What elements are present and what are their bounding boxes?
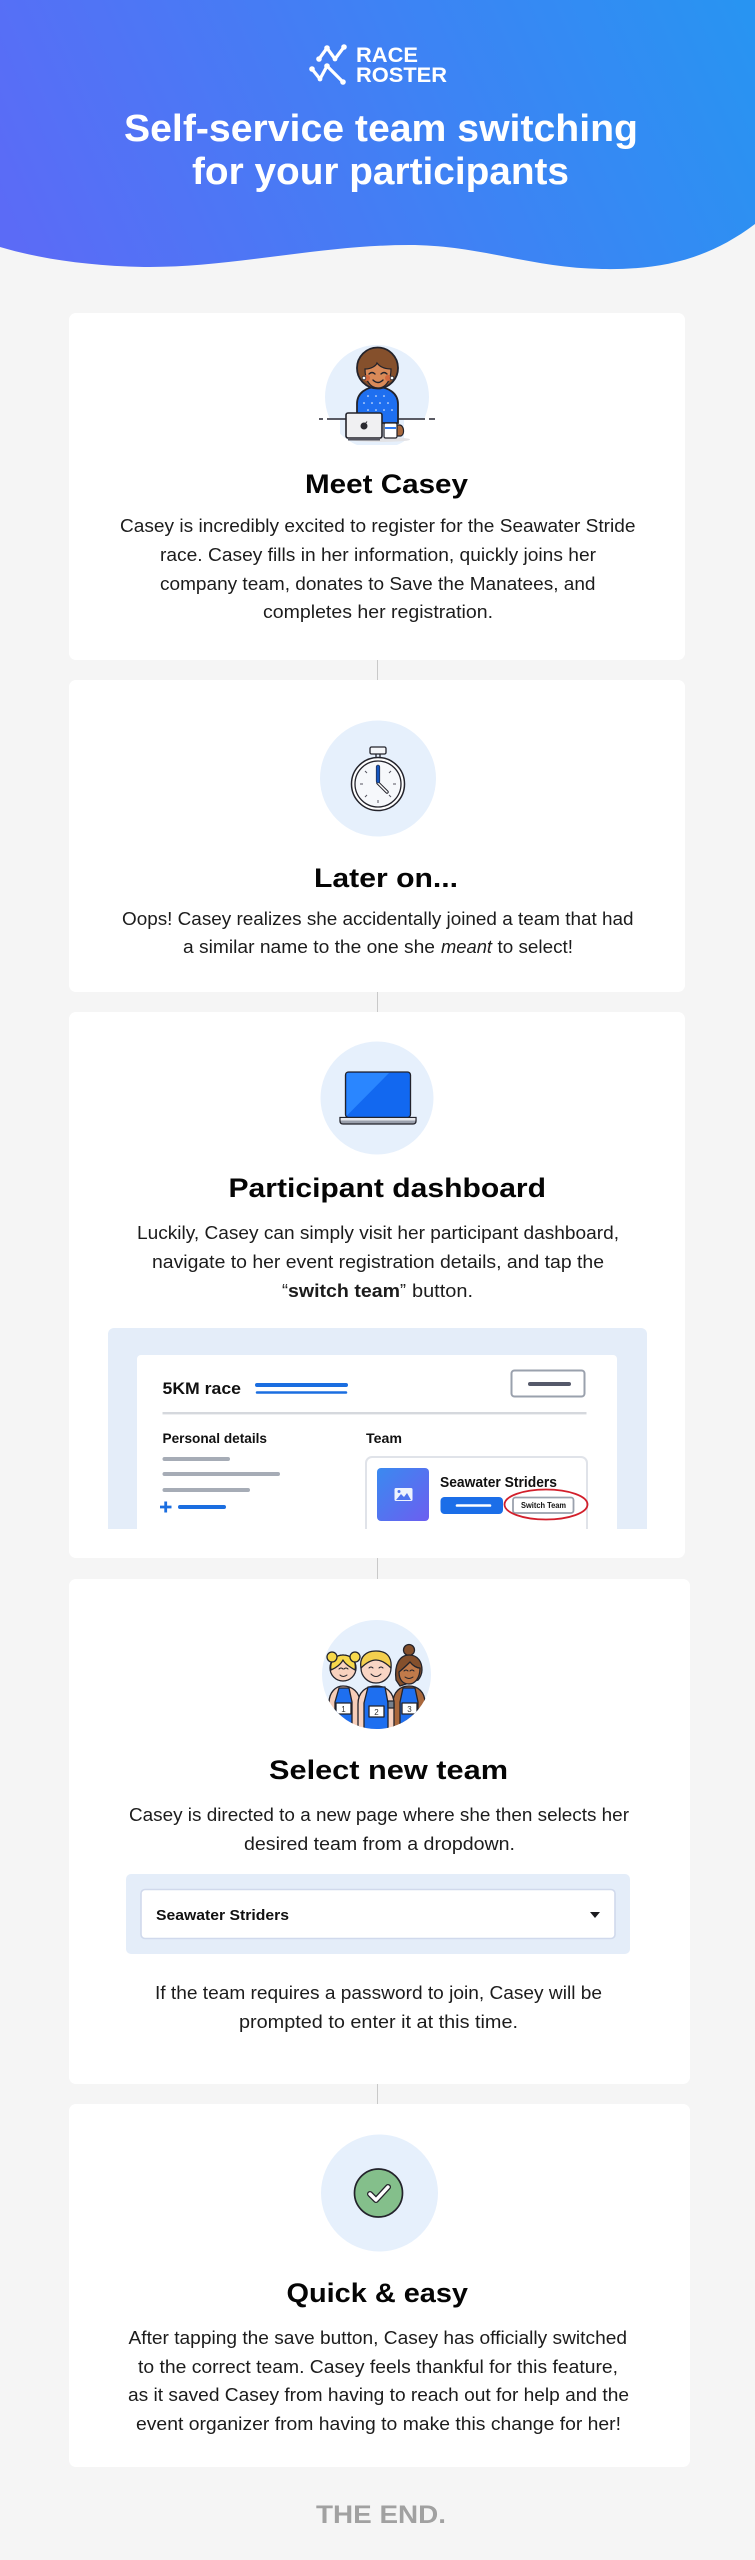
body text: After tapping the save button, Casey has officially switched [128,2328,627,2348]
body text [129,1805,629,1854]
body text [122,909,634,957]
body text: to the correct team. Casey feels thankful for this feature, [138,2357,618,2377]
runner 3: 3 [407,1705,412,1714]
placeholder button [512,1370,584,1396]
panel: Participant dashboard [69,1012,685,1558]
body text: race. Casey fills in her information, quickly joins her [160,545,596,565]
icon: Casey at laptop [319,345,435,449]
body text: desired team from a dropdown. [244,1834,515,1854]
body text: to select! [498,937,573,957]
panel: Select new team [69,1579,690,2084]
heading: Later on... [314,863,458,893]
personal details [160,1430,278,1512]
heading: Participant dashboard [228,1173,546,1203]
connector lines between cards [376,660,378,2104]
body text: meant [441,937,493,957]
body text: password note: prompted to enter it at this time. [239,2012,518,2032]
runner 2: 2 [374,1708,379,1717]
team section [365,1434,588,1529]
panel: Later on [69,680,685,992]
body text [128,2328,629,2434]
dashboard mockup [108,1328,647,1529]
team section: Seawater Striders [440,1475,557,1491]
title: for your participants [192,151,569,193]
dropdown mockup: Seawater Striders [156,1908,289,1924]
body text: a similar name to the one she [183,937,435,957]
runner 1: 1 [341,1705,346,1714]
team section: Team [366,1430,402,1446]
heading: Select new team [269,1755,508,1785]
body text [137,1223,619,1301]
heading: Meet Casey [305,469,468,499]
body text: password note [155,1983,602,2032]
title [124,108,638,193]
body text: password note: If the team requires a password to join, Casey will be [155,1983,602,2003]
body text: Oops! Casey realizes she accidentally joined a team that had [122,909,634,929]
body text: navigate to her event registration details, and tap the [152,1252,604,1272]
body text: completes her registration. [263,602,493,622]
dropdown mockup [126,1874,630,1954]
icon: three runners [322,1620,431,1730]
heading: Quick & easy [286,2278,468,2308]
body text: Casey is directed to a new page where she then selects her [129,1805,629,1825]
panel: Quick and easy [69,2104,690,2467]
icon: laptop [320,1042,434,1154]
panel: Meet Casey [69,313,685,660]
body text: “ [282,1281,288,1301]
body text: button. [412,1281,473,1301]
body text: event organizer from having to make this change for her! [136,2414,621,2434]
race title: 5KM race [162,1379,241,1398]
header wave banner [0,0,755,269]
logo: Race Roster [309,44,447,87]
body text [120,516,636,622]
team section: Switch Team [521,1501,566,1510]
logo: Race Roster: RACE [356,44,418,67]
body text: switch team [288,1281,400,1301]
body text: Luckily, Casey can simply visit her participant dashboard, [137,1223,619,1243]
logo: Race Roster: ROSTER [356,64,447,87]
closing text: the end: THE END. [316,2501,446,2529]
body text: Casey is incredibly excited to register for the Seawater Stride [120,516,636,536]
title: Self-service team switching [124,108,638,150]
icon: check mark [321,2134,438,2252]
body text: as it saved Casey from having to reach out for help and the [128,2385,629,2405]
body text: company team, donates to Save the Manatees, and [160,574,596,594]
personal details: Personal details [162,1430,267,1446]
icon: stopwatch [320,720,436,836]
body text: ” [400,1281,406,1301]
